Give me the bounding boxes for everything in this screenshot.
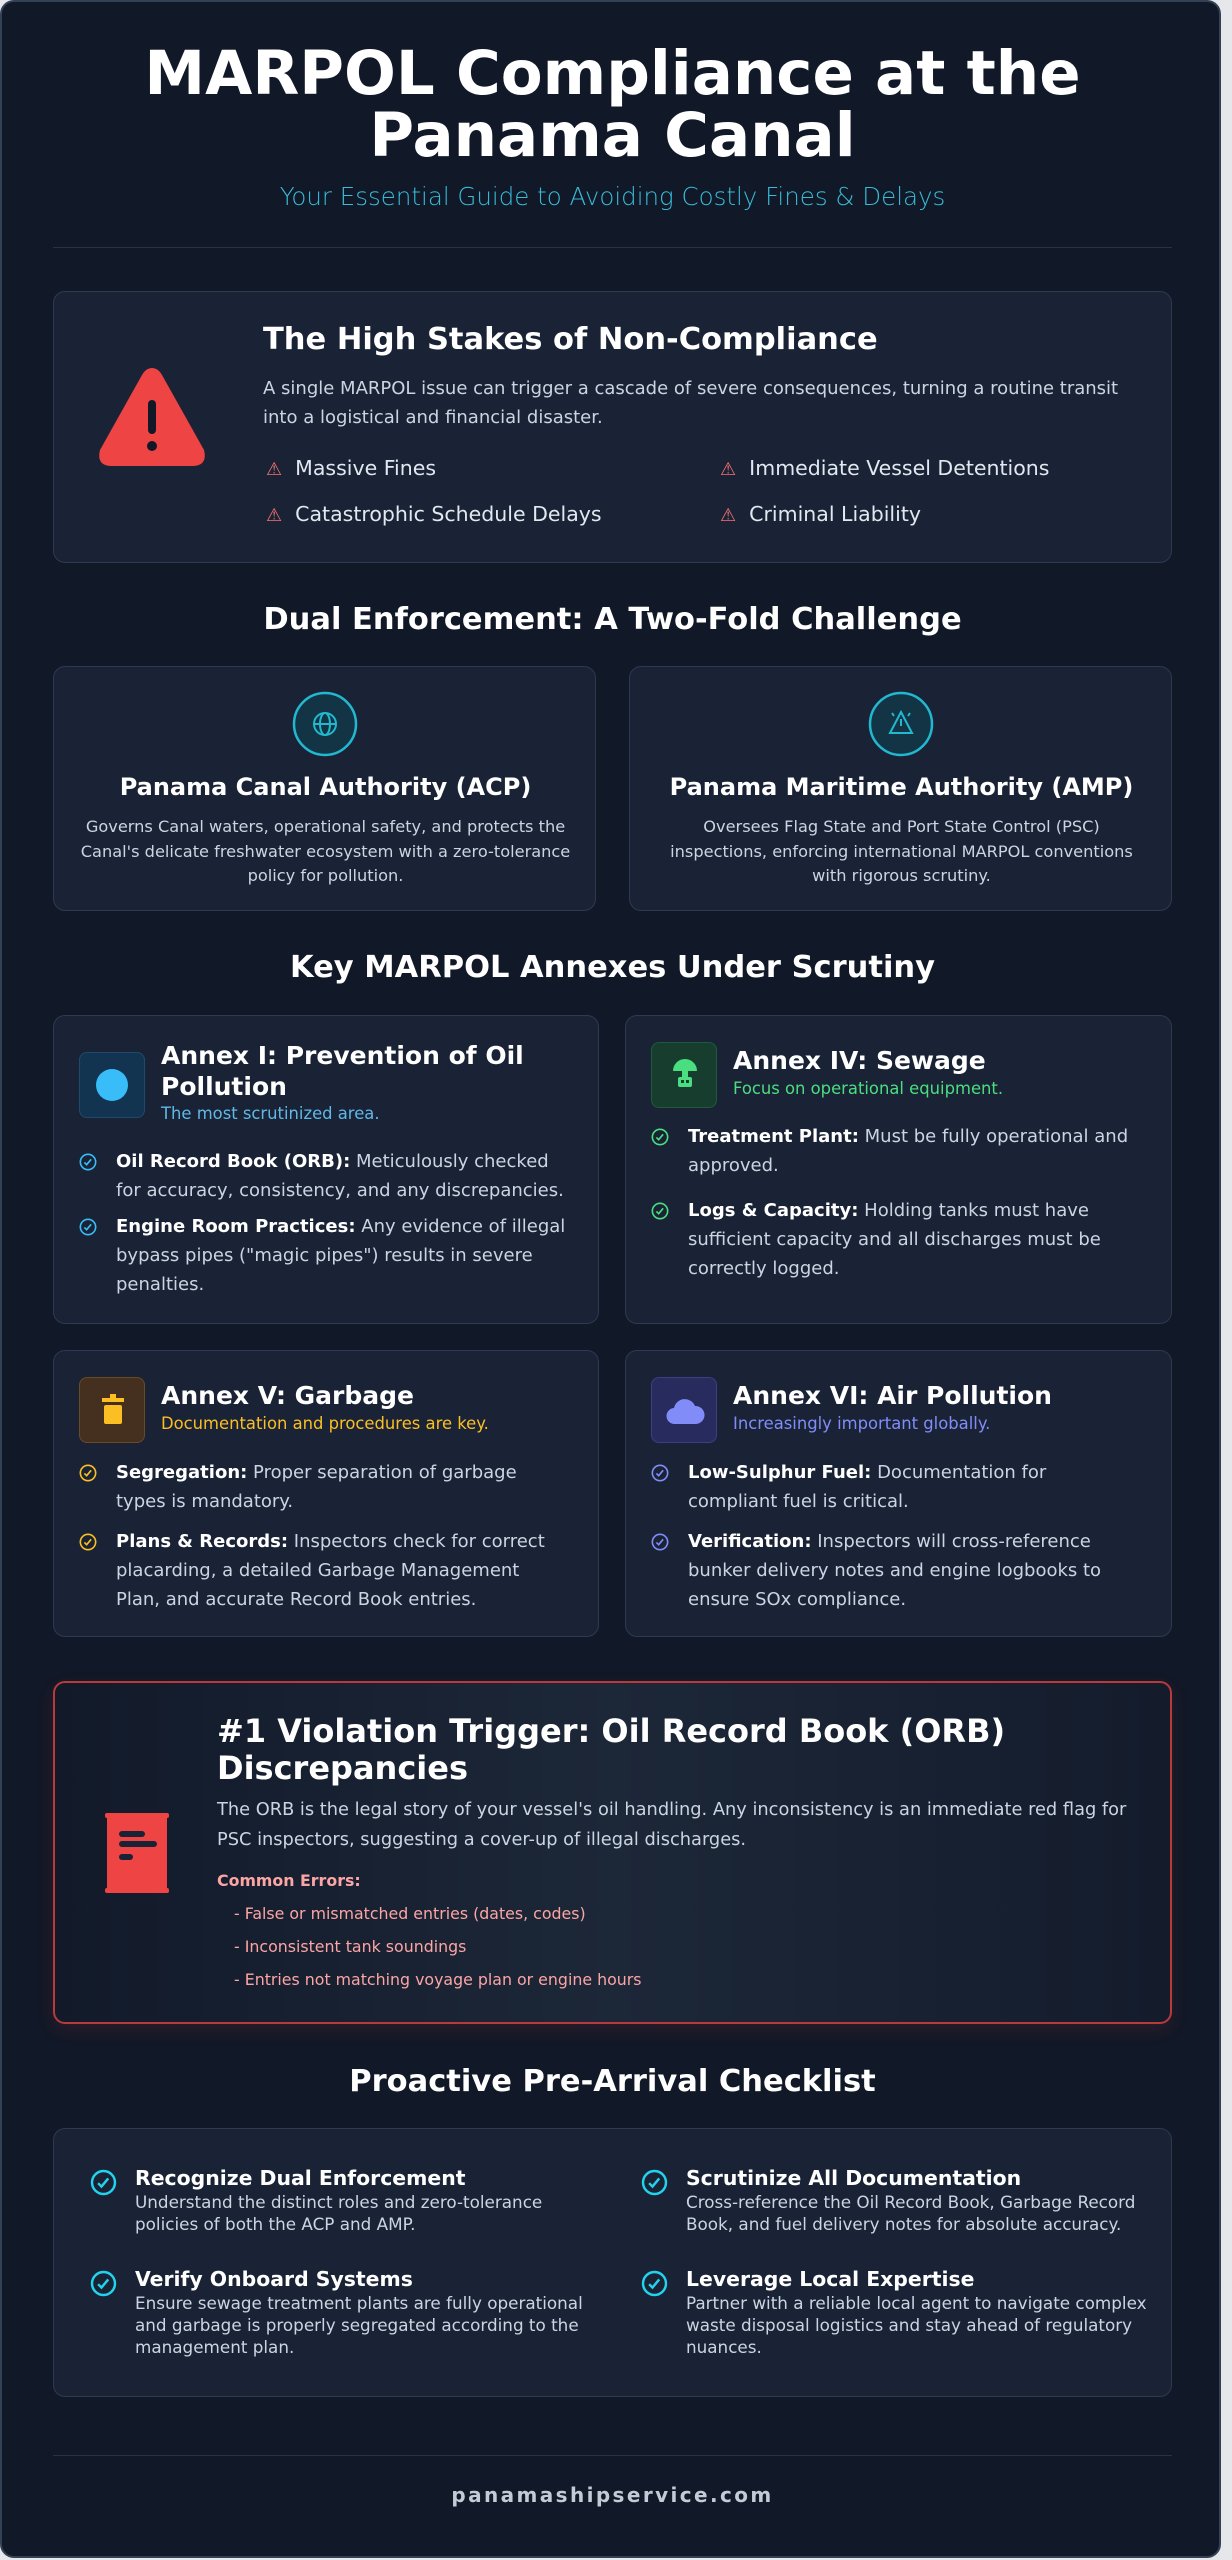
panel: annex IV [625, 1015, 1172, 1324]
item [642, 2166, 1135, 2234]
panel: annex VI [625, 1350, 1172, 1637]
bullet: Segregation: Proper separation of garbage types is mandatory. [116, 1462, 517, 1512]
panel: checklist [53, 2128, 1172, 2397]
title: Panama Canal Authority (ACP) [120, 773, 531, 801]
icon: garbage [79, 1377, 145, 1443]
item: Leverage Local Expertise [686, 2267, 974, 2291]
subtitle: Focus on operational equipment. [733, 1079, 1003, 1098]
icon: book [105, 1813, 169, 1893]
item: Scrutinize All Documentation [686, 2166, 1021, 2190]
title: Annex I: Prevention of Oil Pollution [161, 1041, 524, 1101]
icon: warning [99, 368, 205, 466]
title [144, 38, 1081, 171]
description: Oversees Flag State and Port State Control (PSC) inspections, enforcing international MARPOL conventions with rigorous scrutiny. [670, 817, 1133, 885]
icon: oil [79, 1052, 145, 1118]
list: consequences: ⚠ Criminal Liability [720, 502, 921, 526]
subtitle: The most scrutinized area. [161, 1104, 380, 1123]
title: MARPOL Compliance at the [144, 38, 1081, 109]
heading: The High Stakes of Non-Compliance [263, 322, 878, 357]
bullet: Engine Room Practices: Any evidence of illegal bypass pipes ("magic pipes") results in severe penalties. [116, 1216, 565, 1295]
callout: ORB violation [53, 1681, 1172, 2024]
list: consequences: ⚠ Catastrophic Schedule Delays [266, 502, 602, 526]
text: The ORB is the legal story of your vessel's oil handling. Any inconsistency is an immediate red flag for PSC inspectors, suggesting a cover-up of illegal discharges. [217, 1799, 1126, 1850]
item [642, 2267, 1147, 2357]
panel: ACP [53, 666, 596, 911]
item [90, 2166, 542, 2234]
item: Ensure sewage treatment plants are fully operational and garbage is properly segregated according to the management plan. [135, 2293, 583, 2357]
title: Annex V: Garbage [161, 1381, 414, 1410]
subtitle: Increasingly important globally. [733, 1414, 990, 1433]
bullet: Low-Sulphur Fuel: Documentation for compliant fuel is critical. [688, 1462, 1046, 1512]
list: common errors [217, 1871, 642, 1989]
title: #1 Violation Trigger: Oil Record Book (ORB) Discrepancies [217, 1712, 1005, 1787]
list: consequences: ⚠ Immediate Vessel Detentions [720, 456, 1049, 480]
panel: annex V [53, 1350, 599, 1637]
bullet: Logs & Capacity: Holding tanks must have sufficient capacity and all discharges must be correctly logged. [688, 1200, 1101, 1279]
title: Panama Canal [369, 100, 856, 171]
panel: high stakes [53, 291, 1172, 563]
bullet: Oil Record Book (ORB): Meticulously checked for accuracy, consistency, and any discrepancies. [116, 1151, 564, 1201]
list: common errors: - False or mismatched entries (dates, codes) [234, 1904, 586, 1923]
bullet: Plans & Records: Inspectors check for correct placarding, a detailed Garbage Management Plan, and accurate Record Book entries. [116, 1531, 545, 1610]
title: Annex VI: Air Pollution [733, 1381, 1052, 1410]
list: common errors: - Inconsistent tank soundings [234, 1937, 466, 1956]
icon: sewage [651, 1042, 717, 1108]
panel: AMP [629, 666, 1172, 911]
item: Understand the distinct roles and zero-tolerance policies of both the ACP and AMP. [135, 2192, 542, 2234]
subtitle: Documentation and procedures are key. [161, 1414, 489, 1433]
icon: globe [292, 692, 358, 756]
list: consequences: ⚠ Massive Fines [266, 456, 436, 480]
item: Recognize Dual Enforcement [135, 2166, 465, 2190]
item [90, 2267, 583, 2357]
list: common errors: - Entries not matching voyage plan or engine hours [234, 1970, 642, 1989]
icon: cloud [651, 1377, 717, 1443]
heading: checklist: Proactive Pre-Arrival Checklist [349, 2064, 876, 2099]
description: Governs Canal waters, operational safety, and protects the Canal's delicate freshwater ecosystem with a zero-tolerance policy for pollution. [81, 817, 570, 885]
heading: annexes: Key MARPOL Annexes Under Scrutiny [290, 950, 935, 985]
list: consequences [266, 456, 1049, 526]
item: Verify Onboard Systems [135, 2267, 413, 2291]
bullet: Verification: Inspectors will cross-reference bunker delivery notes and engine logbooks to ensure SOx compliance. [688, 1531, 1101, 1610]
title: Annex IV: Sewage [733, 1046, 986, 1075]
icon: alert [868, 692, 934, 756]
text: A single MARPOL issue can trigger a cascade of severe consequences, turning a routine transit into a logistical and financial disaster. [263, 378, 1118, 428]
subtitle: Your Essential Guide to Avoiding Costly Fines & Delays [280, 182, 945, 211]
list: common errors: Common Errors: [217, 1871, 361, 1890]
heading: dual enforcement: Dual Enforcement: A Two-Fold Challenge [263, 602, 962, 637]
footer: panamashipservice.com [451, 2483, 774, 2507]
item: Partner with a reliable local agent to navigate complex waste disposal logistics and stay ahead of regulatory nuances. [686, 2293, 1147, 2357]
bullet: Treatment Plant: Must be fully operational and approved. [688, 1126, 1128, 1176]
title: Panama Maritime Authority (AMP) [670, 773, 1133, 801]
panel: annex I [53, 1015, 599, 1324]
item: Cross-reference the Oil Record Book, Garbage Record Book, and fuel delivery notes for absolute accuracy. [686, 2192, 1135, 2234]
